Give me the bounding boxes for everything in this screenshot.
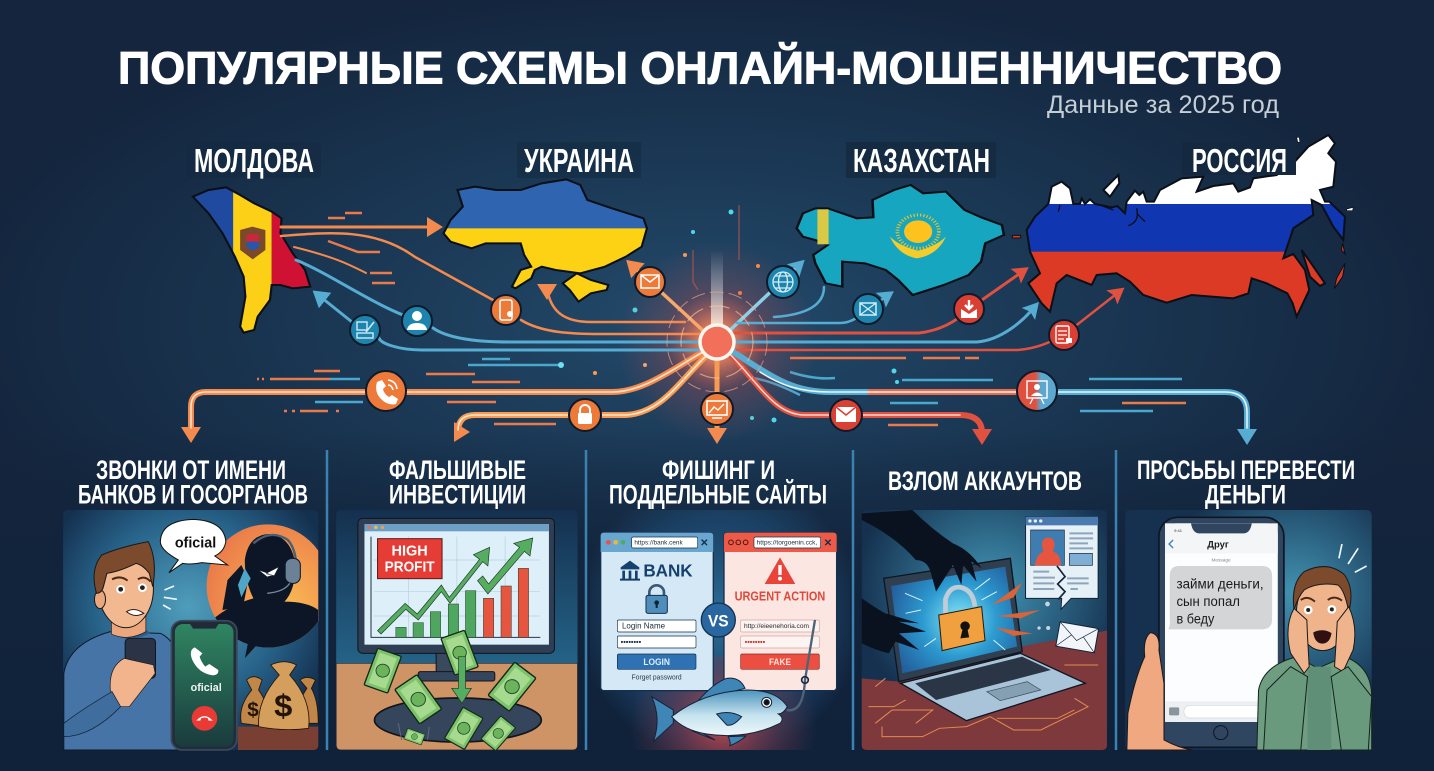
smartphone: 9:41 bbox=[1174, 528, 1183, 533]
scammer circle bbox=[207, 524, 318, 658]
connector lines from centre bbox=[191, 227, 1247, 433]
blue curve to Kazakhstan bbox=[774, 287, 824, 317]
smartphone calling bbox=[171, 621, 237, 750]
heading: investments: ИНВЕСТИЦИИ bbox=[389, 480, 526, 510]
heading: calls bbox=[78, 455, 308, 510]
high profit badge: PROFIT bbox=[385, 559, 435, 575]
icon: form with pen (blue) bbox=[350, 315, 380, 345]
heading: money requests: ДЕНЬГИ bbox=[1205, 480, 1286, 510]
message bubble: сын попал bbox=[1176, 594, 1240, 609]
falling cash bbox=[364, 630, 536, 751]
envelope bbox=[1056, 622, 1099, 653]
scammer silhouette bbox=[212, 534, 318, 660]
red thick highlight bbox=[728, 352, 960, 415]
heading: phishing: ФИШИНГ И bbox=[662, 455, 775, 485]
high profit badge: HIGH bbox=[392, 543, 428, 559]
icon: locked list (red) bbox=[1049, 320, 1079, 350]
subtitle: Данные за 2025 год bbox=[1047, 91, 1279, 119]
panel background bbox=[63, 510, 318, 750]
orange centre down bbox=[714, 352, 720, 432]
real bank window: Forget password bbox=[632, 675, 682, 682]
heading: investments bbox=[389, 455, 526, 510]
padlock bbox=[939, 587, 985, 651]
shards bbox=[992, 583, 1050, 636]
blue to Kazakhstan diagonal bbox=[727, 268, 796, 333]
blue arrow to Russia bbox=[732, 311, 1031, 342]
red-orange overlay on long line bbox=[870, 389, 1030, 395]
title: ПОПУЛЯРНЫЕ СХЕМЫ ОНЛАЙН-МОШЕННИЧЕСТВО bbox=[118, 42, 1282, 94]
man bbox=[64, 542, 178, 750]
heading: phishing bbox=[609, 455, 827, 510]
laptop bbox=[884, 558, 1085, 721]
heading: investments: ФАЛЬШИВЫЕ bbox=[389, 455, 526, 485]
icon: envelope (red) bbox=[830, 399, 862, 431]
message bubble bbox=[1168, 566, 1272, 629]
icon: monitor (orange) bbox=[701, 393, 733, 425]
icon: padlock (orange) bbox=[569, 399, 601, 431]
VS badge: VS bbox=[708, 612, 729, 631]
real bank window bbox=[601, 533, 713, 691]
orange second highlight bbox=[458, 355, 707, 430]
country label: Kazakhstan bbox=[846, 142, 996, 179]
panel background bbox=[590, 510, 850, 750]
message bubble: займи деньги, bbox=[1176, 576, 1264, 591]
hook bbox=[787, 620, 815, 710]
fake site window: FAKE bbox=[769, 657, 791, 667]
blue curve: Moldova bbox=[296, 260, 702, 342]
shocked man bbox=[1257, 544, 1372, 750]
central glow bbox=[617, 242, 817, 442]
orange thick bottom left bbox=[191, 352, 703, 431]
country label: Russia bbox=[1182, 142, 1296, 179]
hole in desk bbox=[374, 698, 541, 742]
fish on hook bbox=[652, 678, 787, 746]
red thick bottom right bbox=[728, 352, 982, 433]
fake site window: https://torgoenin.cck, bbox=[757, 540, 817, 547]
panel background bbox=[1125, 510, 1372, 750]
panel: money request illustration bbox=[1125, 510, 1372, 750]
real bank window: LOGIN bbox=[643, 657, 670, 667]
heading: account hacking: ВЗЛОМ АККАУНТОВ bbox=[888, 466, 1082, 496]
dividers bbox=[327, 450, 1116, 750]
speech bubble bbox=[160, 519, 228, 573]
map: Russia bbox=[1012, 130, 1353, 322]
orange diagonal to Ukraine bbox=[635, 268, 710, 337]
icon: phone document (orange) bbox=[491, 295, 521, 325]
icon: phone call (orange) bbox=[366, 371, 406, 411]
blue thick line bbox=[730, 350, 1247, 433]
real bank window: •••••••• bbox=[621, 638, 642, 647]
heading: calls: БАНКОВ И ГОСОРГАНОВ bbox=[78, 480, 308, 510]
white highlight of long line bbox=[760, 372, 1247, 428]
panel: investments illustration bbox=[336, 510, 578, 751]
VS badge bbox=[701, 603, 735, 637]
red glow bbox=[610, 657, 837, 750]
real bank window: ✕ bbox=[700, 538, 709, 549]
country label: Ukraine: УКРАИНА bbox=[524, 142, 634, 179]
country label: Kazakhstan: КАЗАХСТАН bbox=[853, 142, 990, 179]
panel background bbox=[862, 510, 1107, 750]
heading: phishing: ПОДДЕЛЬНЫЕ САЙТЫ bbox=[609, 478, 827, 510]
heading: calls: ЗВОНКИ ОТ ИМЕНИ bbox=[96, 455, 286, 485]
smartphone: Message bbox=[1211, 557, 1231, 562]
country label: Russia: РОССИЯ bbox=[1192, 142, 1287, 179]
icon: support agent (blue) bbox=[402, 306, 432, 336]
high profit badge bbox=[378, 539, 442, 579]
central burst bbox=[667, 250, 767, 392]
icon: envelope (blue) bbox=[853, 294, 883, 324]
smartphone: Друг bbox=[1207, 539, 1229, 550]
orange second bottom bbox=[458, 355, 707, 432]
sparks bbox=[905, 578, 1005, 650]
intruding hands bbox=[862, 510, 982, 653]
fake site window: •••••••• bbox=[745, 638, 766, 647]
profile card bbox=[1026, 517, 1098, 609]
monitor bbox=[358, 518, 554, 681]
money bags: $ bbox=[247, 700, 259, 722]
panel background bbox=[336, 510, 578, 750]
real bank window: Login Name bbox=[622, 622, 666, 631]
orange thick highlight bbox=[191, 352, 703, 428]
floor bbox=[238, 727, 318, 750]
red arrow 2 to Russia bbox=[737, 295, 1115, 350]
fake site window: URGENT ACTION bbox=[735, 589, 825, 604]
red arrow to Russia bbox=[730, 274, 1019, 333]
orange arrow: to Ukraine straight bbox=[281, 226, 431, 228]
money bags: $ bbox=[274, 688, 292, 724]
lower background fade bbox=[0, 430, 1434, 771]
bar chart bbox=[396, 568, 529, 637]
blue envelope curve bbox=[737, 298, 884, 323]
blue arrow to Moldova bbox=[322, 298, 702, 350]
icon: mail download (red) bbox=[954, 294, 984, 324]
panel: phishing illustration bbox=[590, 510, 850, 750]
circuit traces bbox=[869, 665, 1098, 737]
real bank window: BANK bbox=[643, 561, 693, 581]
decorative particles bbox=[558, 205, 899, 422]
smartphone bbox=[1159, 517, 1284, 747]
speech bubble: oficial bbox=[175, 535, 216, 551]
fake site window: http://eieenehoria.com bbox=[744, 623, 809, 630]
icon: envelope (orange) bbox=[635, 267, 665, 297]
panel: calls illustration bbox=[63, 510, 318, 750]
decorative data dashes bbox=[257, 213, 1186, 425]
icon: globe (blue) bbox=[767, 266, 799, 298]
country label: Moldova: МОЛДОВА bbox=[194, 142, 314, 179]
icon: identity theft (split) bbox=[1017, 371, 1057, 411]
heading: money requests bbox=[1137, 455, 1355, 510]
real bank window: https://bank.cenk bbox=[634, 540, 683, 547]
map: Moldova bbox=[188, 183, 314, 337]
map: Kazakhstan bbox=[797, 185, 1004, 295]
map: Ukraine bbox=[440, 177, 650, 305]
smartphone calling: oficial bbox=[191, 682, 222, 694]
rising arrows bbox=[378, 538, 533, 634]
orange arrow to Ukraine south bbox=[547, 287, 685, 322]
orange thin line bbox=[294, 247, 366, 273]
money bags bbox=[241, 662, 318, 730]
message bubble: в беду bbox=[1176, 611, 1214, 626]
orange curve: Moldova bbox=[281, 233, 702, 334]
desk bbox=[336, 663, 578, 750]
fake site window bbox=[724, 533, 837, 691]
fake site window: ✕ bbox=[824, 538, 832, 549]
desk bbox=[862, 631, 1107, 750]
panel: hacking illustration bbox=[862, 510, 1107, 750]
holding hand bbox=[1127, 633, 1193, 750]
